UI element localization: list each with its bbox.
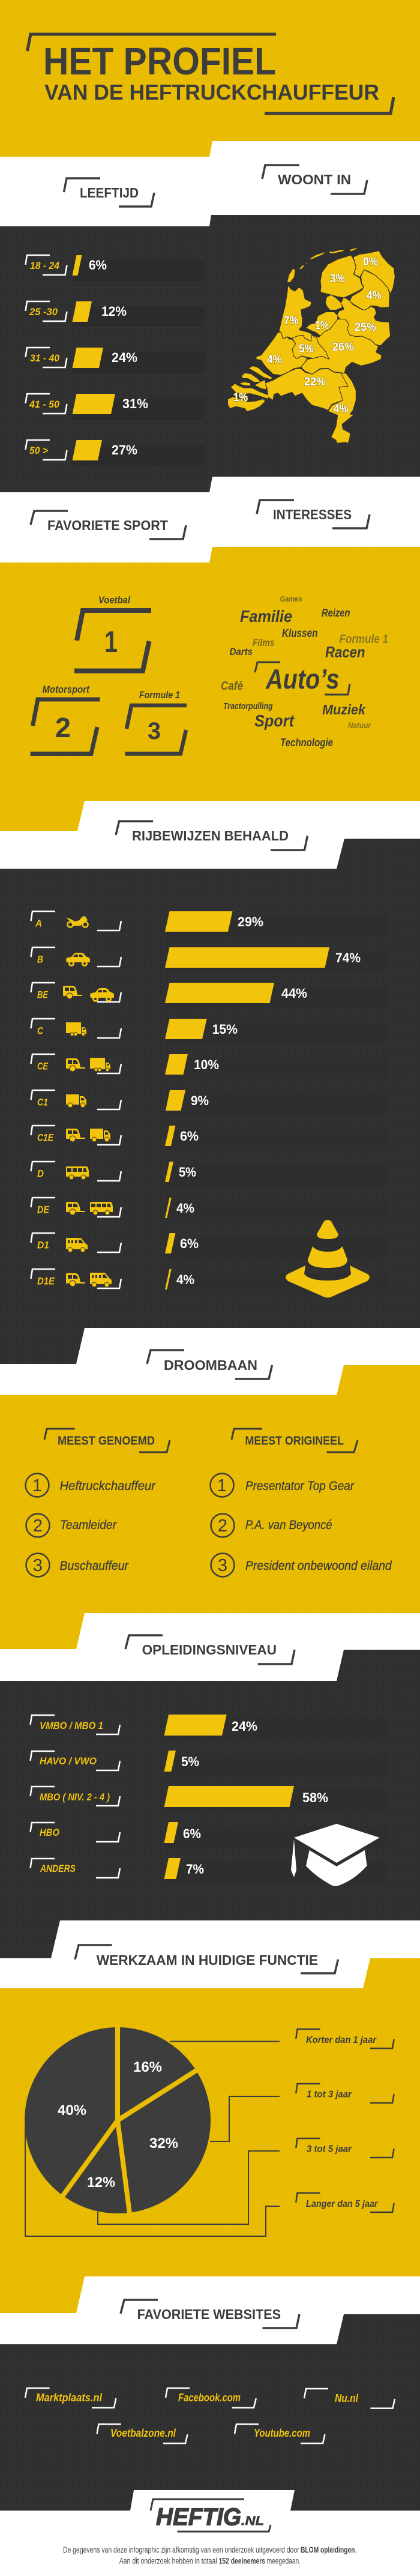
bar row: 18-24 6% [25,255,206,281]
education row: HBO 6% [30,1822,388,1848]
word cloud: interesses: Tractorpulling [223,701,272,711]
column: meest origineel: 1 [217,1476,227,1495]
license row: D1E 4%: 4% [176,1272,194,1287]
bar row: 31-40 24%: 24% [112,350,137,365]
heading: interesses [257,500,370,528]
website: marktplaats.nl: Marktplaats.nl [36,2392,103,2404]
podium: formule 1 rank 3: 3 [148,718,161,744]
heading: opleidingsniveau [125,1635,295,1664]
education row: HAVO / VWO 5% [30,1751,388,1776]
podium: motorsport rank 2 [30,684,100,754]
bar row: 18-24 6%: 18 - 24 [30,260,59,271]
pie chart: werkzaam in huidige functie: 32% [149,2135,178,2152]
map: Netherlands provinces: 25% [355,321,376,334]
bar row: 41-50 31%: 41 - 50 [29,399,60,410]
column: meest origineel: 3 [218,1556,227,1575]
heading: favoriete sport [31,511,186,539]
podium: formule 1 rank 3: Formule 1 [139,689,180,701]
license row: C 15%: C [37,1025,44,1036]
education row: MBO niv. 2-4 58%: MBO ( NIV. 2 - 4 ) [40,1791,110,1803]
podium: motorsport rank 2: 2 [55,712,71,743]
title: VAN DE HEFTRUCKCHAUFFEUR [44,80,379,104]
column: meest origineel: MEEST ORIGINEEL [245,1435,344,1448]
heading: rijbewijzen behaald [116,821,307,850]
map: Netherlands provinces: 4% [334,403,349,415]
website: youtube.com: Youtube.com [254,2427,310,2439]
footer text: Aan dit onderzoek hebben in totaal [119,2557,217,2566]
license row: B 74%: B [37,953,43,965]
website: nu.nl [304,2389,395,2409]
license row: C 15% [31,1019,388,1044]
education row: Anders 7%: ANDERS [40,1863,76,1874]
word cloud: interesses: Auto’s [265,663,340,695]
website: voetbalzone.nl: Voetbalzone.nl [110,2427,176,2439]
panel: header background [0,0,420,157]
podium: voetbal rank 1: 1 [104,625,118,659]
legend: 3 tot 5 jaar: 3 tot 5 jaar [307,2144,352,2155]
map: Netherlands provinces: 1% [315,319,329,332]
column: meest origineel: P.A. van Beyoncé [245,1518,332,1532]
heading: leeftijd [64,178,154,207]
education row: MBO niv. 2-4 58%: 58% [302,1790,328,1805]
license row: D1E 4%: D1E [37,1275,55,1287]
column: meest genoemd: 1 [32,1476,42,1495]
map: Netherlands provinces: 3% [330,273,345,285]
icon: traffic cone [286,1220,370,1298]
legend: korter dan 1 jaar [296,2029,394,2048]
footer text: BLOM opleidingen [301,2545,355,2554]
license row: D 5% [31,1162,388,1187]
bar row: 25-30 12%: 12% [101,304,127,319]
word cloud: interesses: Films [253,637,275,648]
website: youtube.com [235,2424,325,2443]
education row: MBO niv. 2-4 58% [30,1786,388,1812]
education row: HBO 6%: 6% [183,1826,201,1841]
map: Netherlands provinces: 4% [367,289,382,302]
website: facebook.com: Facebook.com [178,2392,241,2404]
panel: websites background [0,2314,420,2511]
word cloud: interesses: Klussen [282,627,318,640]
heading: favoriete websites [121,2300,299,2328]
bar row: 25-30 12% [25,301,206,327]
bar row: 50+ 27%: 27% [112,442,137,457]
bar row: 50+ 27% [25,440,206,466]
map: Netherlands provinces: 0% [363,256,378,268]
word cloud: interesses: Café [221,680,243,693]
panel: sport and interests background [0,547,420,831]
license row: A 29%: 29% [238,914,263,929]
pie chart: werkzaam in huidige functie: 16% [133,2059,162,2075]
license row: CE 10%: 10% [194,1057,219,1072]
footer text [63,2545,357,2566]
license row: D1E 4% [31,1269,388,1294]
bar row: 31-40 24%: 31 - 40 [30,352,59,364]
map: Netherlands provinces [228,247,395,444]
word cloud: interesses: Sport [254,711,295,730]
bar row: 25-30 12%: 25 -30 [29,306,58,318]
license row: DE 4%: 4% [176,1201,194,1216]
pie chart: werkzaam in huidige functie [25,2023,211,2218]
podium: formule 1 rank 3 [125,689,187,754]
column: meest genoemd: Teamleider [60,1518,117,1532]
word cloud: interesses: Formule 1 [340,633,388,646]
logo: heftig.nl: HEFTIG [156,2504,241,2530]
license row: C 15%: 15% [212,1022,238,1037]
word cloud: interesses: Darts [230,646,253,657]
pie chart: werkzaam in huidige functie: 40% [58,2102,86,2119]
education row: VMBO / MBO 1 24% [30,1715,388,1740]
heading: woont in: WOONT IN [278,172,351,187]
icon: graduation cap [291,1824,380,1886]
education row: VMBO / MBO 1 24%: VMBO / MBO 1 [40,1720,103,1731]
license row: C1 9% [31,1090,388,1115]
license row: CE 10% [31,1054,388,1079]
panel: droombaan background [0,1365,420,1649]
column: meest origineel: Presentator Top Gear [245,1479,355,1493]
heading: woont in [262,165,367,194]
map: Netherlands provinces: 4% [267,354,282,366]
heading: interesses: INTERESSES [273,507,352,522]
podium: motorsport rank 2: Motorsport [42,684,90,695]
column: meest genoemd: 3 [33,1556,43,1575]
footer text: 152 deelnemers [219,2557,265,2566]
legend: 3 tot 5 jaar [296,2138,394,2158]
panel: werkzaam background [0,1958,420,2313]
heading: leeftijd: LEEFTIJD [80,185,139,201]
website: voetbalzone.nl [97,2424,187,2443]
license row: DE 4%: DE [37,1204,50,1215]
license row: DE 4% [31,1198,388,1223]
license row: CE 10%: CE [37,1060,48,1072]
pie chart: werkzaam in huidige functie: 12% [87,2174,115,2191]
license row: A 29% [31,911,388,937]
education row: VMBO / MBO 1 24%: 24% [232,1719,257,1734]
license row: C1E 6%: C1E [37,1132,54,1143]
website: facebook.com [166,2388,256,2408]
bar row: 31-40 24% [25,348,206,373]
heading: droombaan [147,1350,272,1379]
website: marktplaats.nl [25,2388,116,2408]
bar row: 18-24 6%: 6% [89,258,107,273]
license row: D1 6% [31,1233,388,1258]
map: Netherlands provinces: 26% [332,341,354,354]
word cloud: interesses: Racen [325,643,365,661]
word cloud: interesses: Familie [240,607,292,626]
word cloud: interesses: Games [280,594,302,603]
license row: C1 9%: 9% [191,1093,209,1108]
word cloud: interesses [221,594,388,749]
panel: opleidingsniveau background [0,1650,420,1958]
column: meest genoemd: MEEST GENOEMD [58,1435,155,1448]
heading: rijbewijzen behaald: RIJBEWIJZEN BEHAALD [132,828,289,843]
column: meest origineel: 2 [218,1516,227,1536]
license row: B 74%: 74% [335,950,361,965]
license row: BE 44%: 44% [281,986,307,1001]
heading: favoriete sport: FAVORIETE SPORT [47,517,169,533]
heading: werkzaam in huidige functie [75,1945,338,1973]
license row: C1E 6%: 6% [180,1129,199,1144]
footer text: . [355,2545,357,2554]
bar row: 41-50 31% [25,394,206,420]
legend: langer dan 5 jaar: Langer dan 5 jaar [306,2199,378,2209]
heading: favoriete websites: FAVORIETE WEBSITES [137,2306,281,2322]
education row: HAVO / VWO 5%: HAVO / VWO [40,1755,97,1767]
column: meest origineel: President onbewoond eiland [245,1559,392,1573]
panel: leeftijd and woont in background [0,215,420,492]
word cloud: interesses: Technologie [280,737,333,749]
legend: langer dan 5 jaar [296,2193,394,2212]
title: HET PROFIEL [43,40,276,83]
license row: B 74% [31,947,388,973]
license row: D 5%: D [37,1168,44,1179]
license row: BE 44% [31,983,388,1008]
word cloud: interesses: Reizen [322,607,350,619]
podium: voetbal rank 1 [74,594,151,671]
logo: heftig.nl [151,2499,271,2532]
column: meest genoemd: Buschauffeur [60,1559,129,1573]
license row: BE 44%: BE [37,989,48,1000]
bar row: 50+ 27%: 50 > [29,445,48,456]
legend: 1 tot 3 jaar [296,2084,394,2103]
license row: A 29%: A [35,917,42,929]
license row: D1 6%: 6% [180,1236,199,1251]
connector lines [25,2041,280,2236]
word cloud: interesses: Natuur [348,720,371,730]
heading: droombaan: DROOMBAAN [164,1357,257,1373]
map: Netherlands provinces: 5% [299,343,314,355]
legend: korter dan 1 jaar: Korter dan 1 jaar [306,2035,377,2045]
license row: C1E 6% [31,1126,388,1151]
license row: C1 9%: C1 [37,1096,48,1108]
panel: rijbewijzen background [0,839,420,1364]
map: Netherlands provinces: 22% [304,376,326,388]
heading: opleidingsniveau: OPLEIDINGSNIVEAU [142,1642,277,1658]
education row: Anders 7%: 7% [186,1862,204,1877]
podium: voetbal rank 1: Voetbal [98,594,131,606]
logo: heftig.nl: .NL [241,2514,264,2528]
education row: HBO 6%: HBO [40,1827,59,1838]
word cloud: interesses: Muziek [322,702,366,717]
column: meest genoemd: 2 [33,1516,43,1536]
license row: D 5%: 5% [179,1165,196,1180]
bar row: 41-50 31%: 31% [122,396,148,411]
title [28,34,394,113]
column: meest genoemd: Heftruckchauffeur [60,1479,156,1493]
heading: werkzaam in huidige functie: WERKZAAM IN HUIDIGE FUNCTIE [97,1952,318,1968]
education row: HAVO / VWO 5%: 5% [181,1754,199,1769]
legend: 1 tot 3 jaar: 1 tot 3 jaar [307,2089,352,2100]
license row: D1 6%: D1 [37,1239,49,1251]
map: Netherlands provinces: 7% [284,315,299,327]
education row: Anders 7% [30,1858,388,1884]
map: Netherlands provinces: 1% [233,391,248,404]
column: meest origineel [210,1429,392,1576]
column: meest genoemd [25,1429,170,1576]
website: nu.nl: Nu.nl [335,2392,359,2404]
footer text: meegedaan. [267,2557,301,2566]
footer text: De gegevens van deze infographic zijn afkomstig van een onderzoek uitgevoerd door [63,2545,299,2554]
